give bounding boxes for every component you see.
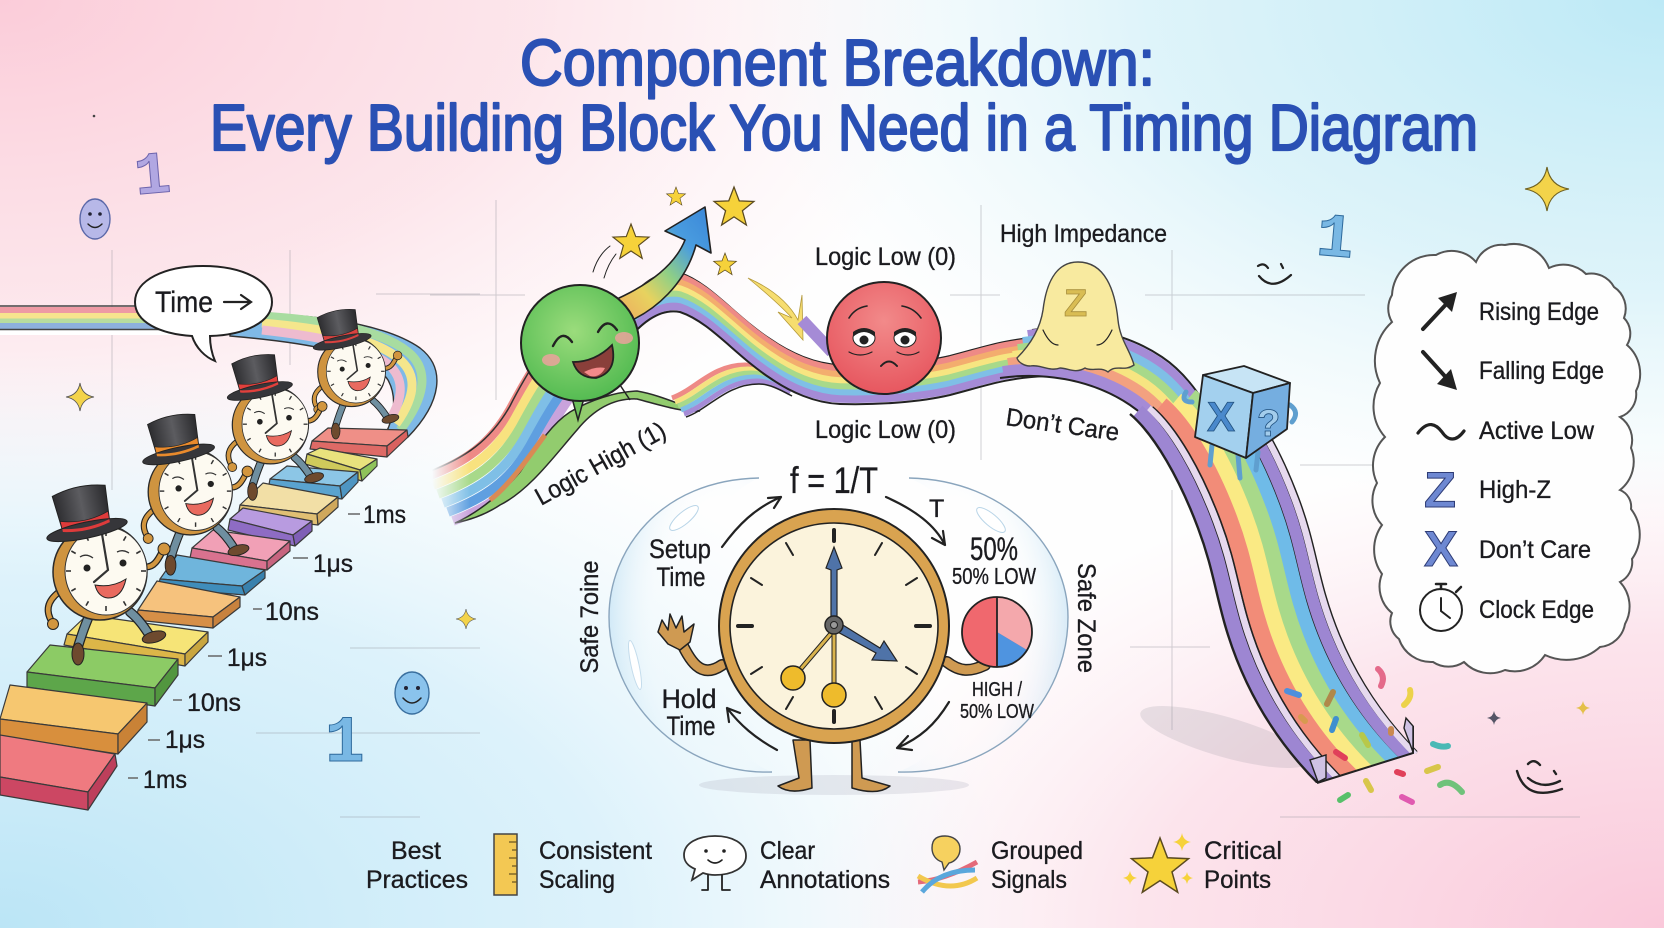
slide end xyxy=(1310,718,1413,783)
motion marks xyxy=(593,246,616,278)
signal labels: High Impedance xyxy=(1000,220,1167,248)
sparkles xyxy=(66,115,1590,725)
clock annotations: f = 1/T xyxy=(790,460,878,501)
best practices strip: Practices xyxy=(366,866,468,894)
time scale labels: 1ms xyxy=(143,766,187,794)
stars around arrow xyxy=(613,187,754,275)
clock annotations: T xyxy=(929,495,944,523)
cube: don't care xyxy=(1184,366,1296,478)
central clock character xyxy=(658,509,985,795)
icon: ruler xyxy=(494,834,517,895)
legend cloud panel xyxy=(1372,244,1640,673)
confetti xyxy=(1287,669,1462,802)
high impedance ghost: Z xyxy=(1064,283,1087,325)
clock annotations: Time xyxy=(666,711,716,741)
legend: rising edge xyxy=(1423,292,1599,329)
icon: critical star xyxy=(1123,833,1193,892)
signal labels: Logic Low (0) xyxy=(815,243,956,271)
clock character 1 xyxy=(38,478,170,665)
time scale labels: 10ns xyxy=(265,598,319,626)
legend: high-z: Z xyxy=(1424,462,1456,518)
main rainbow wave xyxy=(618,272,1045,404)
duty cycle pie xyxy=(962,597,1032,667)
best practices strip: Scaling xyxy=(539,866,615,894)
title xyxy=(210,26,1478,164)
time scale labels xyxy=(128,501,406,794)
clock character 3 xyxy=(220,349,327,500)
timeline ribbon: left horizontal rainbow curving around stairs xyxy=(0,306,437,450)
logic low character: red ball xyxy=(827,282,941,394)
clock annotations: 50% LOW xyxy=(952,563,1036,589)
decorative numeral: blue 1 top right: 1 xyxy=(1313,203,1357,277)
legend: falling edge xyxy=(1423,352,1604,390)
time scale labels: 10ns xyxy=(187,689,241,717)
smiley: sketch bottom right xyxy=(1517,761,1562,793)
title: Every Building Block You Need in a Timing Diagram xyxy=(210,91,1478,164)
clock annotations: 50% xyxy=(970,531,1018,567)
timing arrows xyxy=(722,497,949,750)
legend: don't care: Don’t Care xyxy=(1479,536,1591,564)
smiley: sketch top right xyxy=(1258,264,1291,284)
safe zone bubbles xyxy=(609,478,1068,772)
time scale labels: 1μs xyxy=(165,726,205,754)
legend: don't care xyxy=(1424,521,1591,577)
signal labels xyxy=(530,220,1167,511)
falling yellow arrow xyxy=(748,278,803,340)
title: Component Breakdown: xyxy=(520,26,1155,99)
clock annotations: Safe Zone xyxy=(1072,563,1100,673)
best practices strip: Best xyxy=(391,837,441,865)
green strand xyxy=(455,391,700,523)
speech bubble: time: Time xyxy=(155,286,213,319)
best practices strip xyxy=(366,833,1282,895)
best practices strip: Critical xyxy=(1204,837,1282,865)
clock annotations xyxy=(576,460,1100,741)
icon: annotation speech character xyxy=(684,836,746,890)
purple piece into red ball xyxy=(802,320,832,352)
best practices strip: Grouped xyxy=(991,837,1083,865)
clock annotations: Setup xyxy=(649,534,711,564)
legend: rising edge: Rising Edge xyxy=(1479,298,1599,326)
speech bubble: time xyxy=(135,266,272,361)
decorative numeral: blue 1 lower: 1 xyxy=(325,706,365,781)
signal labels: Logic High (1) xyxy=(530,416,671,511)
smiley: purple xyxy=(80,199,110,239)
clock annotations: Hold xyxy=(662,684,716,714)
clock annotations: 50% LOW xyxy=(960,701,1034,723)
legend: clock edge: Clock Edge xyxy=(1479,596,1594,624)
time scale labels: 1ms xyxy=(363,501,406,529)
cube: don't care: X xyxy=(1207,393,1235,440)
clock annotations: Safe 7oine xyxy=(576,560,604,674)
legend: falling edge: Falling Edge xyxy=(1479,357,1604,385)
small rainbow crossing xyxy=(672,365,792,417)
clock annotations: HIGH / xyxy=(972,679,1022,701)
clock annotations: Time xyxy=(656,562,706,592)
rising ribbon strand and green strand xyxy=(434,370,700,526)
arrow: rising edge rainbow arrow xyxy=(610,207,711,322)
high impedance ghost xyxy=(1017,262,1134,372)
ribbon: ghost to cube xyxy=(1000,328,1232,520)
legend: don't care: X xyxy=(1424,521,1458,577)
decorative numeral: purple 1: 1 xyxy=(132,143,174,213)
legend: active low xyxy=(1418,417,1595,445)
clock character 4 xyxy=(307,305,402,439)
rainbow slide xyxy=(1130,384,1430,795)
legend: active low: Active Low xyxy=(1479,417,1595,445)
legend: high-z xyxy=(1424,462,1551,518)
best practices strip: Clear xyxy=(760,837,815,865)
logic high character: green ball xyxy=(521,285,639,420)
slide shadow xyxy=(1135,694,1315,780)
stairs: rainbow blocks xyxy=(0,428,408,810)
best practices strip: Consistent xyxy=(539,837,652,865)
signal labels: Don’t Care xyxy=(1004,403,1121,447)
legend: high-z: High-Z xyxy=(1479,476,1551,504)
clock character 2 xyxy=(135,408,253,575)
best practices strip: Annotations xyxy=(760,866,890,894)
icon: grouped signals xyxy=(918,836,977,892)
signal labels: Logic Low (0) xyxy=(815,416,956,444)
best practices strip: Signals xyxy=(991,866,1067,894)
legend: clock edge xyxy=(1420,584,1594,631)
time scale labels: 1μs xyxy=(313,550,353,578)
best practices strip: Points xyxy=(1204,866,1271,894)
cube: don't care: ? xyxy=(1257,403,1280,445)
smiley: blue xyxy=(395,672,429,714)
time scale labels: 1μs xyxy=(227,644,267,672)
